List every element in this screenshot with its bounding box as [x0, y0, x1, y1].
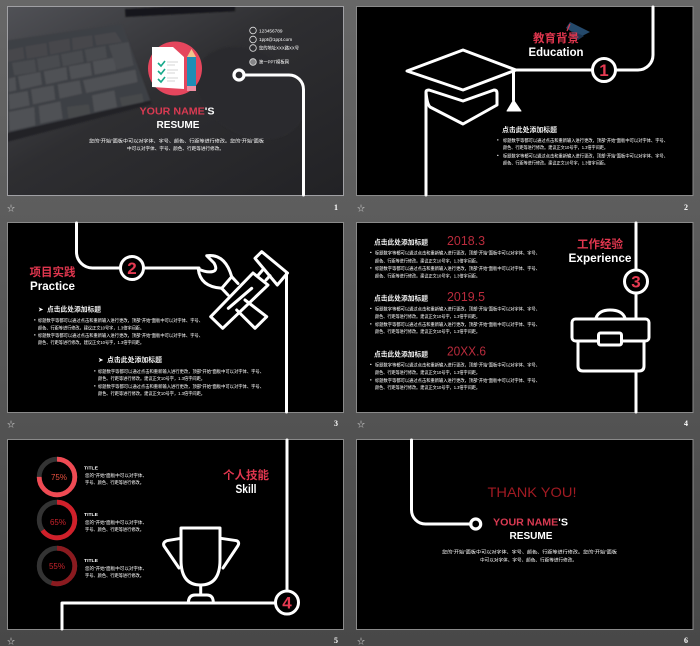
step marker 4 [276, 591, 298, 614]
timeline item 2018.3: • [370, 250, 372, 255]
icon: graduation cap [407, 50, 521, 195]
footer: slide stars and page numbers: ☆ [7, 204, 15, 213]
timeline item 2018.3: 标题数字等都可以通过点击和重新输入进行更改，顶部“开始”面板中可以对字体、字号、 [375, 265, 540, 272]
step marker 2 [120, 256, 144, 280]
timeline item 2018.3: 颜色、行距等进行修改。建议正文10号字，1.3倍字间距。 [375, 272, 480, 280]
heading: skill [223, 468, 269, 496]
contact details: 您的地址XXX路XX号 [259, 44, 299, 52]
heading: education: 教育背景 [533, 31, 579, 45]
footer: slide stars and page numbers: ☆ [7, 420, 15, 429]
connector line [62, 440, 287, 629]
panel: slide 1 cover [7, 3, 344, 196]
text block: practice group 1: 标题数字等都可以通过点击和重新输入进行更改，顶部“开始”面板中可以对字体、字号、 [38, 332, 203, 339]
heading: thank you: THANK YOU! [488, 484, 576, 500]
timeline item 20XX.6: 颜色、行距等进行修改。建议正文10号字，1.3倍字间距。 [375, 384, 480, 391]
contact details: 第一PPT模板网 [259, 58, 289, 66]
text block: intro: 中可以对字体、字号、颜色、行距等进行修改。 [127, 145, 224, 152]
timeline item 2018.3: 点击此处添加标题 [374, 238, 428, 246]
step marker 4: 4 [282, 594, 292, 612]
timeline item 2019.5: 2019.5 [447, 290, 485, 304]
timeline item 2018.3: • [370, 266, 372, 270]
text block: practice group 1: 颜色、行距等进行修改。建议正文10号字，1.3倍字间距。 [38, 324, 144, 332]
text block: practice group 1: • [34, 332, 36, 338]
timeline item 2019.5: • [370, 322, 372, 326]
text block: practice group 2: • [94, 384, 96, 388]
connector line [76, 223, 199, 268]
text block: practice group 2: • [94, 368, 96, 374]
skill text 2 [84, 512, 147, 533]
contact details: 123456789 [259, 28, 283, 34]
timeline item 20XX.6: 标题数字等都可以通过点击和重新输入进行更改，顶部“开始”面板中可以对字体、字号、 [375, 362, 540, 368]
title: your name's resume [493, 516, 568, 542]
icon: briefcase [572, 310, 649, 371]
title: your name's resume: RESUME [510, 530, 552, 542]
connector line with ring [234, 70, 304, 195]
timeline item 2018.3: 2018.3 [447, 234, 485, 248]
heading: skill: Skill [236, 484, 256, 496]
timeline item 20XX.6: 20XX.6 [447, 344, 486, 358]
donut chart 55% [39, 548, 75, 584]
skill text 2: 字号、颜色、行距等进行修改。 [85, 526, 144, 533]
footer: slide stars and page numbers: 1 [334, 203, 338, 212]
heading: experience: 工作经验 [577, 237, 623, 251]
step marker 1: 1 [599, 61, 609, 80]
donut chart 75%: 75% [51, 473, 67, 482]
skill text 3: 字号、颜色、行距等进行修改。 [85, 572, 144, 579]
heading: practice: 项目实践 [30, 265, 76, 279]
icon: document and pencil [148, 42, 202, 96]
text block: closing [442, 548, 617, 564]
text block: education details: 标题数字等都可以通过点击和重新输入进行更改，顶部“开始”面板中可以对字体、字号、 [503, 137, 668, 144]
text block: education details: 颜色、行距等进行修改。建议正文10号字，1.3倍字间距。 [503, 160, 608, 166]
panel: slide 5 skill [8, 440, 344, 630]
contact details [250, 27, 299, 66]
text block: closing: 您的“开始”面板中可以对字体、字号、颜色、行距等进行修改。您的“开始”面板 [442, 548, 617, 556]
icon: wrench and hammer [198, 252, 288, 412]
heading: experience [568, 237, 632, 265]
timeline item 20XX.6: • [370, 378, 372, 382]
timeline item 2019.5: 标题数字等都可以通过点击和重新输入进行更改，顶部“开始”面板中可以对字体、字号、 [375, 306, 540, 312]
footer: slide stars and page numbers: 3 [334, 419, 338, 428]
timeline item 2019.5: 颜色、行距等进行修改。建议正文10号字，1.3倍字间距。 [375, 328, 480, 335]
text block: practice group 2 [94, 355, 264, 397]
panel: slide 2 education [356, 6, 693, 196]
timeline item 2018.3: 颜色、行距等进行修改。建议正文10号字，1.3倍字间距。 [375, 258, 480, 264]
text block: practice group 1: ➤ [38, 306, 44, 314]
skill text 3: 您的“开始”面板中可以对字体、 [85, 565, 147, 572]
text block: practice group 2: 标题数字等都可以通过点击和重新输入进行更改，顶部“开始”面板中可以对字体、字号、 [98, 368, 264, 375]
heading: experience: Experience [568, 253, 632, 265]
text block: education details: 颜色、行距等进行修改。建议正文10号字，1.3倍字间距。 [503, 144, 608, 151]
text block: education details: 标题数字等都可以通过点击和重新输入进行更改，顶部“开始”面板中可以对字体、字号、 [503, 152, 668, 160]
skill text 2: 您的“开始”面板中可以对字体、 [85, 519, 147, 526]
footer: slide stars and page numbers: 2 [684, 203, 688, 212]
text block: practice group 2: 颜色、行距等进行修改。建议正文10号字，1.3倍字间距。 [98, 390, 205, 397]
footer: slide stars and page numbers: ☆ [7, 637, 15, 646]
heading: education [528, 31, 584, 59]
title: your name's resume [140, 106, 214, 131]
skill text 3 [84, 558, 147, 579]
panel: slide 4 experience [356, 222, 693, 412]
timeline item 20XX.6 [370, 344, 540, 391]
footer: slide stars and page numbers: 6 [684, 636, 688, 645]
timeline item 2019.5: 颜色、行距等进行修改。建议正文10号字，1.3倍字间距。 [375, 313, 480, 320]
timeline item 2018.3: 标题数字等都可以通过点击和重新输入进行更改，顶部“开始”面板中可以对字体、字号、 [375, 250, 540, 256]
text block: education details: 点击此处添加标题 [502, 125, 557, 134]
skill text 1: 字号、颜色、行距等进行修改。 [85, 479, 144, 486]
text block: intro [89, 138, 264, 152]
connector line [634, 223, 638, 412]
text block: practice group 2: ➤ [98, 357, 104, 364]
skill text 3: TITLE [84, 558, 98, 563]
photo: keyboard and mouse [8, 7, 236, 142]
panel: slide 3 practice [8, 222, 344, 412]
footer: slide stars and page numbers: 4 [684, 419, 688, 428]
text block: practice group 1: 点击此处添加标题 [47, 304, 101, 314]
heading: practice: Practice [30, 281, 75, 293]
text block: practice group 2: 颜色、行距等进行修改。建议正文10号字，1.3倍字间距。 [98, 375, 205, 382]
timeline item 2019.5 [370, 290, 540, 335]
connector line [516, 7, 653, 70]
skill text 2: TITLE [84, 512, 98, 517]
timeline item 2019.5: 标题数字等都可以通过点击和重新输入进行更改，顶部“开始”面板中可以对字体、字号、 [375, 321, 540, 328]
donut chart 65%: 65% [50, 518, 66, 527]
text block: intro: 您的“开始”面板中可以对字体、字号、颜色、行距等进行修改。您的“开始”面板 [89, 138, 264, 144]
step marker 3 [624, 270, 648, 293]
title: your name's resume: YOUR NAME'S [140, 106, 214, 118]
timeline item 2018.3 [370, 234, 540, 280]
donut chart 55%: 55% [49, 562, 65, 571]
donut chart 75% [39, 459, 75, 495]
heading: skill: 个人技能 [223, 468, 269, 482]
text block: practice group 2: 点击此处添加标题 [107, 355, 162, 364]
timeline item 2019.5: 点击此处添加标题 [374, 294, 428, 302]
text block: education details: • [497, 138, 499, 142]
timeline item 20XX.6: 点击此处添加标题 [374, 350, 428, 358]
timeline item 20XX.6: 标题数字等都可以通过点击和重新输入进行更改，顶部“开始”面板中可以对字体、字号、 [375, 377, 540, 384]
timeline item 2019.5: • [370, 306, 372, 311]
footer: slide stars and page numbers: ☆ [357, 420, 365, 429]
connector line with ring [412, 440, 481, 529]
step marker 3: 3 [631, 272, 641, 292]
title: your name's resume: RESUME [156, 119, 200, 131]
text block: closing: 中可以对字体、字号、颜色、行距等进行修改。 [480, 556, 577, 564]
footer: slide stars and page numbers: 5 [334, 636, 338, 645]
text block: practice group 1 [34, 304, 203, 346]
skill text 1 [84, 466, 147, 486]
text block: practice group 1: • [34, 318, 36, 322]
skill text 1: TITLE [84, 466, 98, 470]
title: your name's resume: YOUR NAME'S [493, 516, 568, 528]
timeline item 20XX.6: 颜色、行距等进行修改。建议正文10号字，1.3倍字间距。 [375, 369, 480, 376]
text block: practice group 1: 标题数字等都可以通过点击和重新输入进行更改，顶部“开始”面板中可以对字体、字号、 [38, 317, 203, 324]
donut chart 65% [39, 502, 75, 538]
step marker 1 [592, 58, 616, 82]
icon: small blue cap [566, 22, 590, 40]
text block: education details: • [497, 153, 499, 158]
step marker 2: 2 [127, 259, 137, 278]
footer: slide stars and page numbers [7, 203, 688, 646]
skill text 1: 您的“开始”面板中可以对字体、 [85, 472, 147, 479]
contact details: 1ppt@1ppt.com [259, 37, 292, 42]
timeline item 20XX.6: • [370, 362, 372, 367]
text block: practice group 2: 标题数字等都可以通过点击和重新输入进行更改，顶部“开始”面板中可以对字体、字号、 [98, 383, 264, 390]
text block: practice group 1: 颜色、行距等进行修改。建议正文10号字，1.3倍字间距。 [38, 339, 144, 346]
text block: education details [497, 125, 668, 166]
icon: trophy [164, 528, 239, 602]
heading: practice [30, 265, 76, 293]
footer: slide stars and page numbers: ☆ [357, 637, 365, 646]
panel: slide 6 thank you [356, 440, 693, 630]
footer: slide stars and page numbers: ☆ [357, 204, 365, 213]
heading: education: Education [528, 47, 584, 59]
